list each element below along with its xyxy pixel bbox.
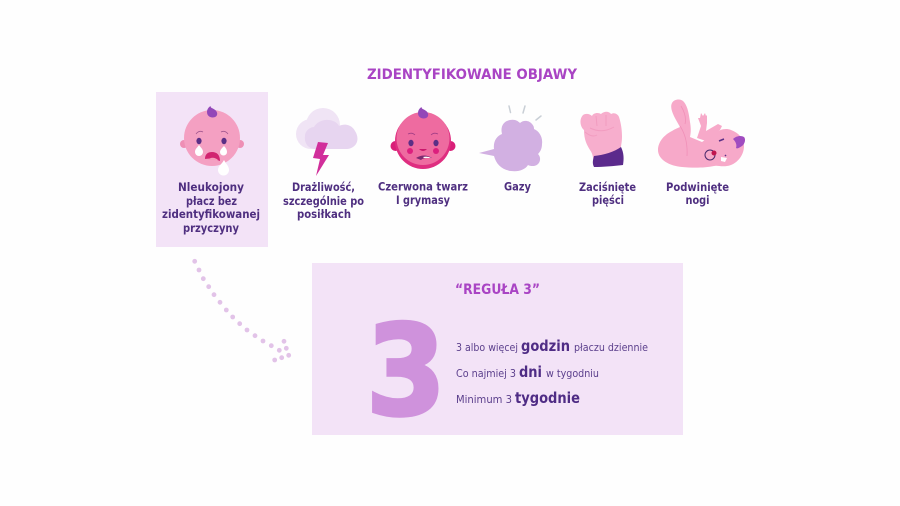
icon: gas cloud xyxy=(479,106,542,171)
icon: sleeve xyxy=(593,147,624,167)
label: bent legs xyxy=(666,180,729,207)
icon: crying baby xyxy=(180,106,244,176)
text: hours: 3 albo więcej xyxy=(456,342,518,354)
label: red face and grimaces: I grymasy xyxy=(396,193,450,207)
icon: clenched fist xyxy=(580,112,624,167)
icon: red-faced baby xyxy=(390,107,456,169)
label: irritability: szczególnie po xyxy=(283,194,364,208)
panel: highlighted symptom xyxy=(156,92,268,247)
text: days: dni xyxy=(519,363,542,381)
text: days: w tygodniu xyxy=(546,368,599,380)
label: irritability: posiłkach xyxy=(297,207,351,221)
baby mouth xyxy=(705,150,715,160)
icon: baby with bent legs xyxy=(658,99,745,168)
title: ZIDENTYFIKOWANE OBJAWY xyxy=(367,67,577,83)
text: hours: płaczu dziennie xyxy=(574,342,648,354)
text: weeks: tygodnie xyxy=(515,389,580,407)
label: red face and grimaces xyxy=(378,180,468,207)
baby arm xyxy=(697,113,722,141)
icon: lightning xyxy=(313,142,329,176)
label: inconsolable crying: płacz bez xyxy=(186,194,237,208)
label: irritability xyxy=(283,180,364,221)
text: weeks xyxy=(456,389,580,407)
text: hours: godzin xyxy=(521,337,570,355)
arrow: dotted xyxy=(192,259,291,362)
text: days: Co najmiej 3 xyxy=(456,368,516,380)
heading: rule of 3: “REGUŁA 3” xyxy=(455,282,540,298)
big number 3: 3 xyxy=(366,300,446,444)
baby hair xyxy=(733,136,745,148)
icon: storm cloud xyxy=(296,108,357,176)
text: days xyxy=(456,363,599,381)
label: inconsolable crying: przyczyny xyxy=(183,221,239,235)
label: inconsolable crying xyxy=(162,180,260,235)
label: bent legs: Podwinięte xyxy=(666,180,729,194)
label: inconsolable crying: Nleukojony xyxy=(178,180,244,194)
label: irritability: Drażliwość, xyxy=(292,180,355,194)
text: hours xyxy=(456,337,648,355)
panel: rule of 3 xyxy=(312,263,683,435)
label: bent legs: nogi xyxy=(686,193,710,207)
label: gas: Gazy xyxy=(504,180,531,194)
label: inconsolable crying: zidentyfikowanej xyxy=(162,207,260,221)
label: clenched fists: Zaciśnięte xyxy=(579,180,636,194)
label: clenched fists xyxy=(579,180,636,207)
label: red face and grimaces: Czerwona twarz xyxy=(378,180,468,194)
label: clenched fists: pięści xyxy=(592,193,624,207)
text: weeks: Minimum 3 xyxy=(456,394,512,406)
